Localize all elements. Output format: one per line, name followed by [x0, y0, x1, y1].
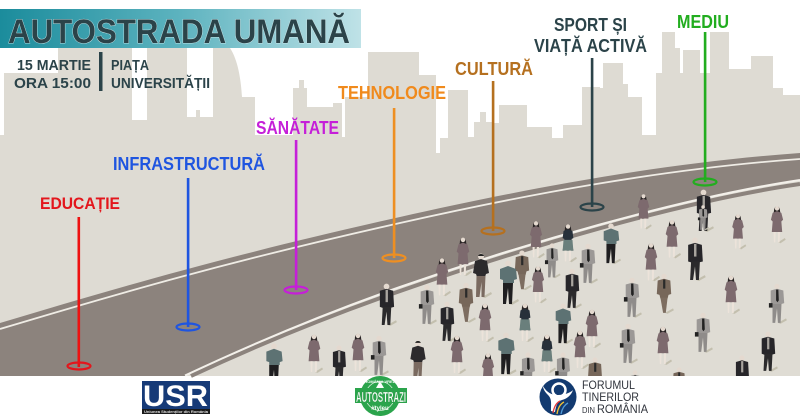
location: [111, 57, 210, 92]
marker: cultura: [455, 58, 533, 234]
road verge lower: [191, 184, 800, 376]
title: AUTOSTRADA UMANĂ: [8, 13, 350, 51]
ground: [0, 150, 800, 376]
road edge line upper: [0, 159, 800, 329]
marker: sanatate: [256, 117, 339, 294]
marker: educatie: EDUCAȚIE: [40, 194, 120, 213]
logo: Forumul Tinerilor din Romania: [540, 378, 648, 416]
date and time: 15 MARTIE: [17, 57, 91, 74]
marker: tehnologie: [338, 83, 446, 262]
marker: mediu: [677, 12, 729, 186]
marker: infrastructura: INFRASTRUCTURĂ: [113, 153, 265, 174]
logo: Forumul Tinerilor din Romania: TINERILOR: [582, 390, 639, 404]
location: PIAȚA: [111, 57, 149, 74]
logo: USR: Uniunea Studenților din România: [144, 409, 209, 414]
marker: cultura: CULTURĂ: [455, 58, 533, 79]
date and time: ORA 15:00: [14, 75, 91, 92]
road edge line lower: [185, 180, 800, 376]
date and time: [14, 57, 91, 92]
logo: USR: USR: [143, 380, 208, 413]
logo: Forumul Tinerilor din Romania: FORUMUL: [582, 378, 635, 392]
location: UNIVERSITĂȚII: [111, 75, 210, 92]
marker: mediu: MEDIU: [677, 12, 729, 32]
marker: sport si viata activa: [534, 15, 647, 210]
marker: tehnologie: TEHNOLOGIE: [338, 83, 446, 103]
logo: Autostrazi: AUTOSTRAZI: [356, 389, 406, 406]
marker: sport si viata activa: VIAȚĂ ACTIVĂ: [534, 35, 647, 56]
logo: Forumul Tinerilor din Romania: DIN: [582, 406, 595, 415]
marker: educatie: [40, 194, 120, 370]
marker: sanatate: SĂNĂTATE: [256, 117, 339, 138]
logo: Autostrazi: #tyleu: [371, 406, 389, 412]
crowd: [266, 190, 787, 376]
road: [0, 153, 800, 376]
logo: Forumul Tinerilor din Romania: ROMÂNIA: [597, 401, 648, 416]
logo: Autostrazi: [355, 376, 407, 416]
marker: sport si viata activa: SPORT ȘI: [554, 15, 627, 35]
title banner: [0, 9, 361, 48]
logo: Autostrazi: ROMÂNIA VREA: [364, 379, 396, 384]
marker: infrastructura: [113, 153, 265, 330]
info divider: [99, 52, 102, 91]
